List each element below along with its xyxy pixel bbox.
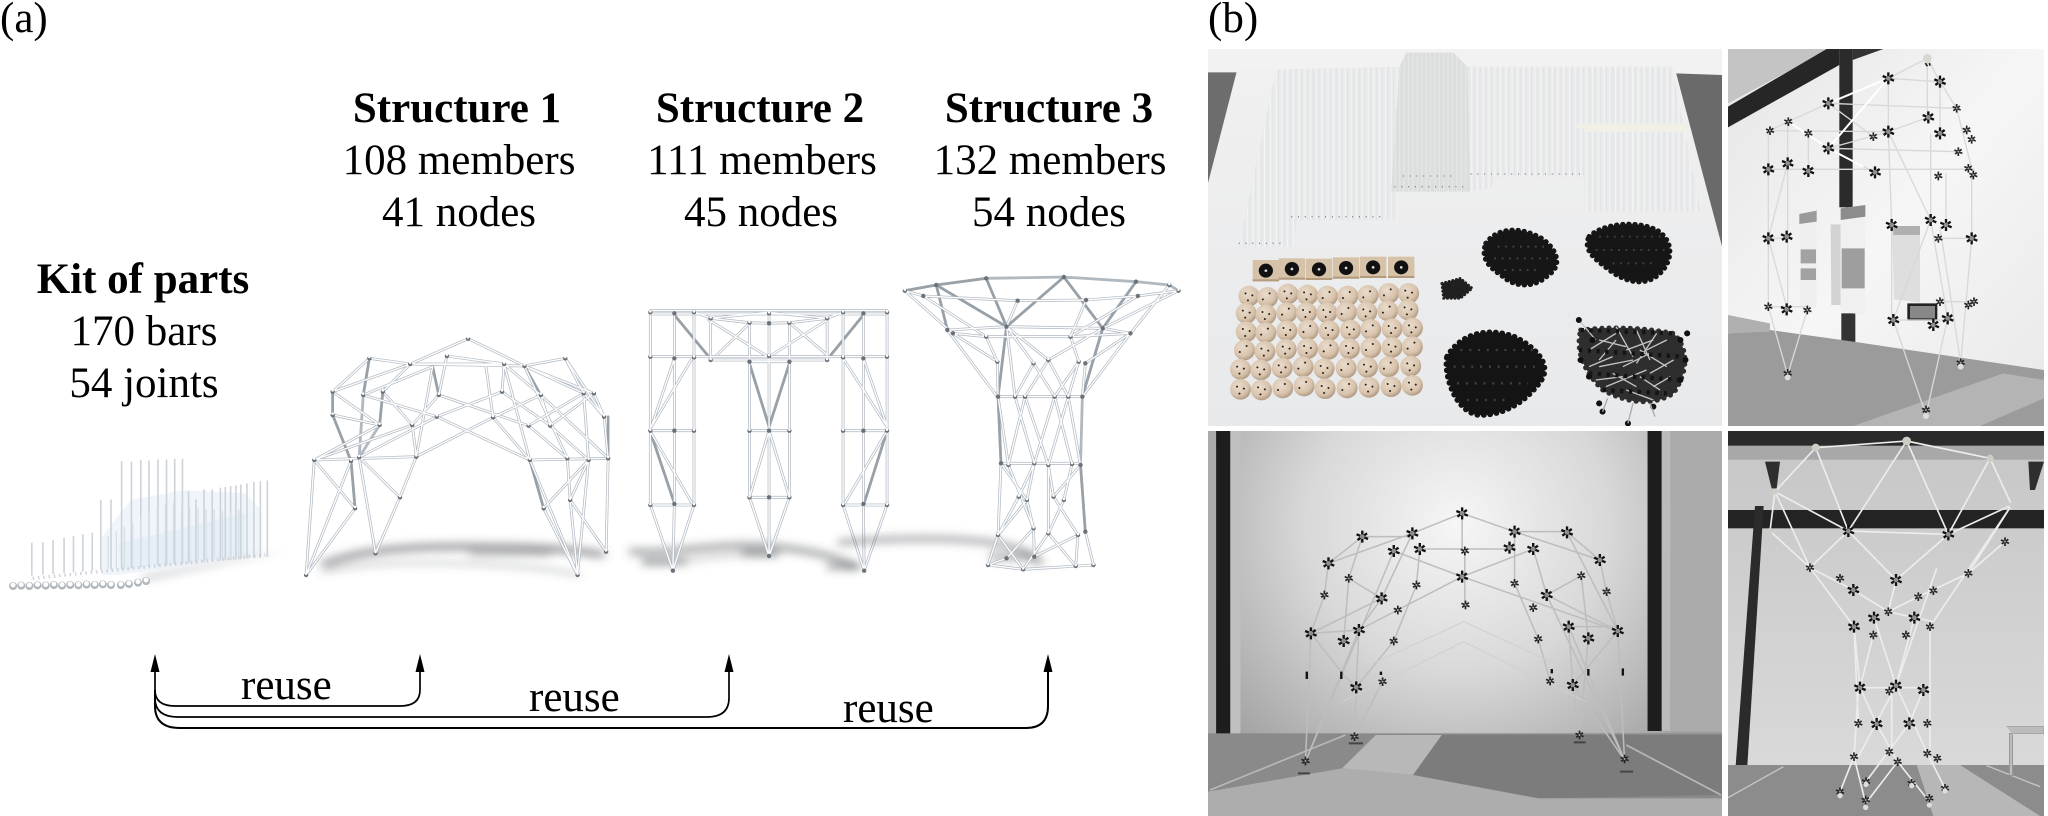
black parts pile C small — [1442, 278, 1472, 298]
wooden ball joints — [1230, 283, 1423, 400]
ceiling and duct — [1728, 431, 2044, 490]
heading: structure 2 — [647, 85, 877, 236]
shadow of structure 3 — [838, 539, 1042, 565]
black parts pile B — [1587, 224, 1670, 282]
heading: structure 3 — [934, 85, 1166, 236]
plastic bars — [1239, 53, 1701, 247]
steel beam and column — [1728, 506, 2044, 766]
coloured bar ends — [1239, 174, 1582, 243]
photo: structure 1 dome against white wall — [1208, 431, 1722, 816]
bars of structure — [1768, 58, 1975, 415]
heading: structure 3: 54 nodes — [972, 189, 1126, 236]
stacked central bars — [1391, 53, 1471, 192]
heading: structure 2: 45 nodes — [684, 189, 838, 236]
structure 2: table frame — [629, 311, 887, 571]
heading: structure 3: 132 members — [934, 137, 1166, 184]
photo: structure 3 funnel tower in hall — [1728, 431, 2044, 816]
wooden tiles with magnets — [1253, 257, 1414, 281]
black parts pile D — [1446, 332, 1545, 415]
heading: kit of parts: 54 joints — [69, 360, 219, 407]
heading: structure 1 — [343, 85, 575, 236]
joints — [1767, 437, 2014, 807]
bars of dome — [1305, 513, 1625, 762]
shadow of structure 2 — [629, 546, 860, 567]
photo: structure 2 assembled in exhibition — [1728, 49, 2044, 426]
steel columns — [1208, 431, 1722, 734]
photo: kit of parts laid out on table — [1208, 49, 1722, 426]
structure 1: dome frame — [306, 337, 608, 575]
steel beam and column — [1728, 49, 1883, 343]
heading: structure 1: Structure 1 — [353, 85, 561, 132]
heading: kit of parts — [37, 256, 249, 407]
arrow: kit to structure 2 — [155, 654, 734, 717]
label: reuse 3: reuse — [843, 685, 934, 732]
floor — [1728, 765, 2044, 816]
heading: structure 2: Structure 2 — [656, 85, 864, 132]
black parts pile A — [1484, 230, 1557, 285]
arrow: kit to structure 1 — [150, 654, 424, 706]
structure 3: funnel tower — [838, 277, 1179, 569]
label: reuse 1: reuse — [241, 662, 332, 709]
heading: kit of parts: Kit of parts — [37, 256, 249, 303]
side table — [2007, 727, 2044, 776]
shadow of structure 1 — [322, 547, 604, 575]
joints — [1298, 507, 1633, 773]
exhibition posters — [1799, 205, 1937, 321]
bars of tower — [1770, 441, 2012, 803]
heading: structure 1: 41 nodes — [382, 189, 536, 236]
pile of screws — [1579, 320, 1687, 423]
faint wall shadow of dome — [1342, 622, 1586, 702]
floor — [1208, 733, 1722, 816]
label: reuse 2: reuse — [529, 674, 620, 721]
kit of parts: bars and joints — [13, 459, 282, 586]
heading: structure 2: 111 members — [647, 137, 877, 184]
reuse arrows — [150, 654, 1052, 732]
heading: structure 1: 108 members — [343, 137, 575, 184]
heading: kit of parts: 170 bars — [71, 308, 217, 355]
joints — [1763, 54, 1978, 416]
heading: structure 3: Structure 3 — [945, 85, 1153, 132]
floor — [1728, 330, 2044, 426]
arrow: kit to structure 3 — [155, 654, 1052, 728]
